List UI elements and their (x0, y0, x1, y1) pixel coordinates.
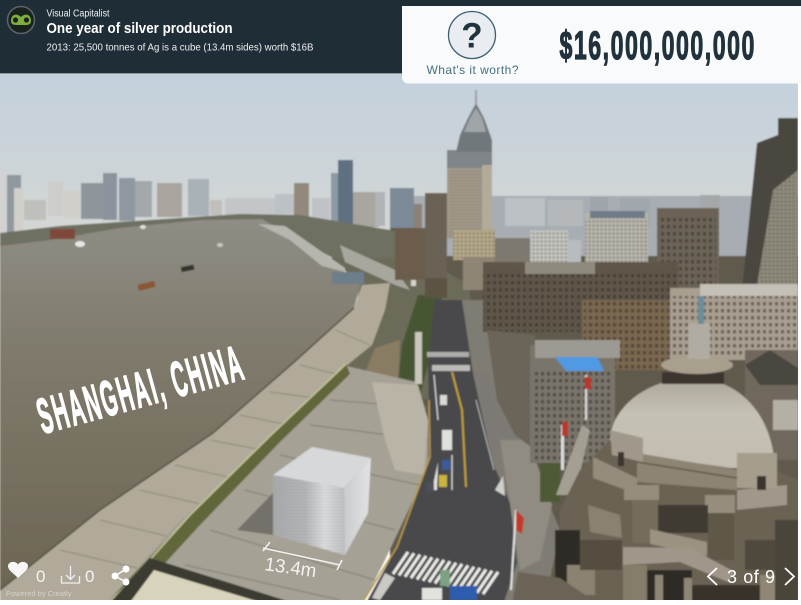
right sidewalk (462, 300, 560, 605)
brown tower (657, 208, 719, 288)
question icon: ? (461, 16, 483, 56)
main crowned tower (425, 90, 492, 278)
page number: 3 of 9 (727, 567, 775, 587)
flat roof left (556, 425, 590, 495)
download count: 0 (85, 567, 94, 586)
building plinth foreground roof (512, 572, 590, 605)
question icon (448, 12, 496, 58)
question label: What's it worth? (426, 63, 519, 77)
credit: Powered by Creatly (6, 589, 72, 598)
piers (632, 498, 658, 543)
dome (610, 378, 775, 468)
left dormer (610, 430, 643, 462)
subtitle: 2013: 25,500 tonnes of Ag is a cube (13.4m sides) worth $16B (46, 42, 314, 54)
plaza light stripes (372, 382, 428, 475)
plaza (105, 366, 428, 605)
domed building (555, 296, 798, 605)
logo (8, 6, 34, 34)
haze band (400, 196, 800, 256)
drum ribs (637, 453, 737, 490)
icon: previous arrow (708, 568, 717, 585)
upper crossings (427, 352, 469, 357)
lower columns (623, 565, 647, 605)
value panel (402, 6, 801, 84)
roof corner foreground (108, 558, 300, 605)
mid-rise tan block (453, 230, 495, 260)
city base (390, 215, 801, 605)
small crossings (432, 462, 438, 490)
tree line (398, 295, 442, 395)
left balustrade (593, 457, 637, 494)
silver cube (273, 447, 371, 555)
distant skyline right (505, 198, 545, 226)
value figure: $16,000,000,000 (560, 22, 754, 68)
location label: SHANGHAI, CHINA (32, 337, 249, 445)
right balcony (745, 540, 775, 570)
top header band (0, 0, 801, 74)
entablature (623, 547, 735, 582)
dark window bay (658, 505, 708, 533)
publisher: Visual Capitalist (46, 8, 110, 20)
low-rise row behind (483, 262, 678, 332)
measure: cube edge line (263, 542, 342, 582)
flags (585, 375, 587, 420)
far bank (0, 213, 396, 259)
hotel block (585, 213, 648, 263)
road lane marks (434, 375, 438, 420)
promenade paving joints (60, 330, 370, 570)
large crossing (393, 552, 498, 594)
street and trees band (330, 258, 470, 400)
distant skyline left (0, 160, 422, 234)
center yellow line (452, 372, 466, 487)
cream block right (670, 288, 798, 360)
right corner building (745, 350, 798, 460)
measure label: 13.4m (263, 554, 318, 582)
cube shadow (237, 493, 273, 535)
river (0, 219, 361, 590)
icon: download (62, 566, 80, 583)
left curved balcony (588, 505, 622, 538)
title: One year of silver production (46, 21, 232, 37)
road (365, 300, 517, 605)
central balcony (650, 529, 707, 556)
right dormer (737, 453, 777, 488)
icon: share (112, 566, 129, 585)
social bar (6, 562, 129, 598)
road yellow edge (362, 400, 430, 603)
white block (530, 230, 568, 264)
traffic (420, 394, 478, 600)
icon: heart (8, 562, 28, 578)
lake edge (0, 308, 354, 590)
street corner buildings (487, 330, 535, 450)
tall right tower (742, 118, 798, 290)
sky (0, 70, 801, 260)
marina (258, 224, 345, 272)
building body (560, 440, 798, 605)
pager (708, 567, 794, 587)
boats (138, 281, 155, 291)
green fence strip (105, 364, 350, 605)
right balustrade (737, 485, 787, 510)
obelisk (410, 278, 417, 287)
icon: next arrow (785, 568, 794, 585)
dark left base (555, 530, 580, 605)
promenade (0, 283, 390, 605)
like count: 0 (36, 567, 45, 586)
dome collar (662, 372, 724, 384)
